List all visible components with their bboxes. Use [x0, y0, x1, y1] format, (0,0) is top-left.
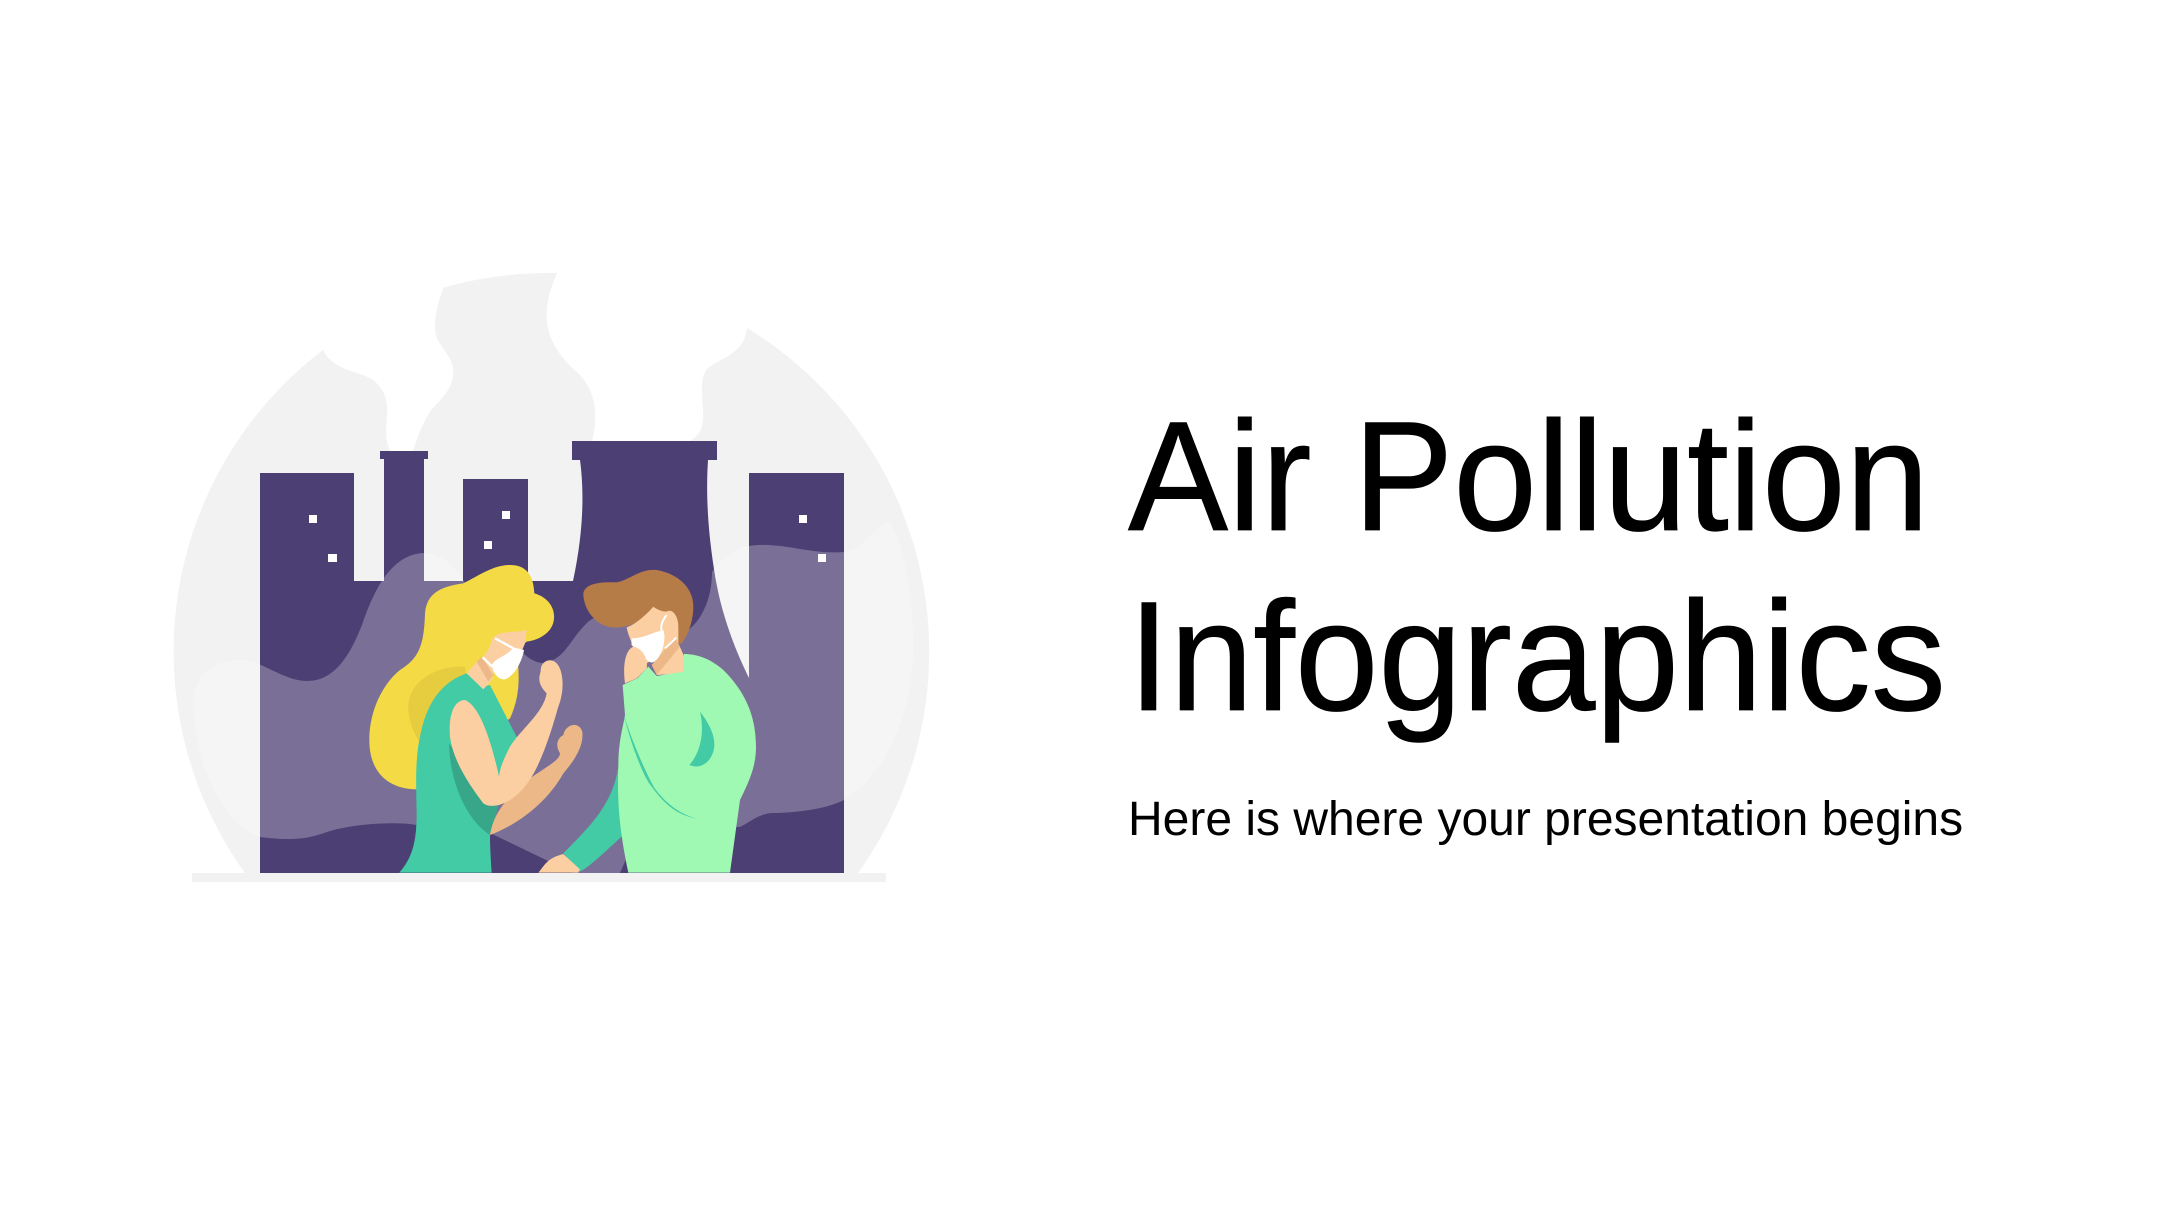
woman hair	[369, 565, 554, 789]
building: middle	[463, 479, 528, 599]
chimney: small	[380, 451, 428, 600]
dress shadow	[449, 743, 498, 835]
man hair	[583, 570, 693, 645]
man face mask	[632, 615, 676, 663]
ground strip	[192, 873, 886, 882]
windows	[309, 511, 826, 562]
woman neck	[467, 660, 497, 689]
man lower hand	[538, 854, 580, 873]
sweater pocket fold	[689, 712, 714, 766]
man raised hand	[624, 647, 647, 683]
factory skyline	[260, 441, 844, 873]
man sweater	[618, 654, 756, 873]
background smoke blob	[174, 273, 929, 873]
people, traced in 3x crop coordinates	[369, 565, 756, 873]
illustration: air pollution scene	[174, 273, 929, 882]
building: left	[260, 473, 354, 873]
sweater sleeve line	[623, 713, 702, 819]
gap beside large chimney	[715, 575, 749, 678]
woman neck shadow	[477, 657, 493, 682]
woman back arm	[490, 725, 583, 835]
chimney: large	[570, 441, 720, 600]
title	[1128, 389, 1946, 744]
man neck shadow	[652, 637, 680, 675]
woman front arm	[450, 660, 563, 806]
man back arm	[563, 767, 622, 872]
woman face mask	[483, 638, 524, 679]
man	[538, 570, 756, 873]
hair shadow	[408, 667, 467, 740]
title: Air Pollution	[1128, 389, 1929, 564]
man neck	[655, 643, 684, 675]
woman face	[483, 630, 527, 675]
building: right	[749, 473, 844, 873]
subtitle: Here is where your presentation begins	[1128, 793, 1963, 846]
man face	[627, 607, 678, 663]
smog overlay	[193, 520, 913, 873]
woman	[369, 565, 583, 873]
skyline base	[354, 581, 749, 873]
woman dress	[399, 673, 520, 873]
title: Infographics	[1128, 569, 1946, 744]
